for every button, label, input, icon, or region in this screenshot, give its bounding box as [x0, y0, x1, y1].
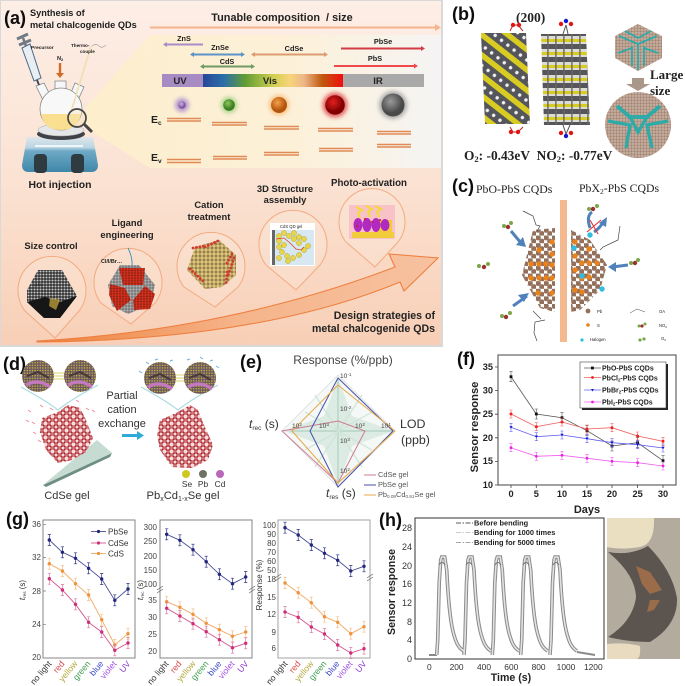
- label: large size: Large: [650, 67, 683, 82]
- legend f: -PbS CQDs: [621, 388, 659, 394]
- label: large size: size: [650, 83, 670, 98]
- chart: t res: 28: [32, 587, 42, 596]
- label PbxCd1-xSe gel: x: [160, 496, 164, 503]
- legend c: S: [597, 323, 600, 328]
- small nanocrystal: [615, 24, 662, 71]
- y tick labels: 12: [402, 598, 412, 608]
- label PbxCd1-xSe gel: Pb: [147, 490, 160, 502]
- legend h: [456, 518, 555, 547]
- tick labels: 10: [355, 423, 362, 430]
- legend c: O: [661, 336, 664, 341]
- legend f: PbO-PbS CQDs: [602, 366, 654, 372]
- series: PbBr2-PbS: [511, 427, 663, 448]
- y tick labels: 10: [483, 480, 493, 490]
- x tick labels: [427, 662, 603, 672]
- illustration: hot injection apparatus: Precursor: [31, 45, 54, 51]
- tick labels: 1: [388, 422, 391, 427]
- text: partial cation exchange: cation: [107, 404, 137, 416]
- axis label: t res: res: [329, 494, 339, 501]
- label CdSe gel: CdSe gel: [44, 490, 90, 502]
- chart: t rec: 250: [144, 537, 158, 546]
- exchanged gel: [139, 357, 219, 468]
- panel (a): synthesis and design strategies: [0, 0, 442, 346]
- large nanocrystal: [605, 92, 671, 158]
- label PbxCd1-xSe gel: 1-x: [178, 496, 188, 503]
- chart: response: red: [287, 659, 303, 675]
- chart: t rec: 100: [144, 580, 158, 589]
- tick labels: 10: [340, 406, 347, 413]
- x tick labels: 1200: [584, 662, 603, 672]
- illustration: hot injection apparatus: N: [57, 56, 61, 62]
- chart: t res: yellow: [57, 658, 80, 684]
- x tick labels: 600: [504, 662, 519, 672]
- adsorption energies: 2: [474, 154, 479, 164]
- slab: O2 adsorption: [481, 23, 530, 134]
- spectrum bar: IR: [373, 76, 383, 87]
- legend e: Se gel: [414, 490, 436, 499]
- big design arrow: [37, 254, 438, 342]
- y tick labels: 15: [483, 456, 493, 466]
- legend d: Se: [182, 479, 192, 489]
- axis label: t res: (s): [338, 486, 356, 500]
- caption: design strategies: metal chalcogenide QDs: [312, 323, 435, 335]
- tick labels: 3: [326, 422, 329, 427]
- blocked cross: [587, 220, 601, 234]
- text: partial cation exchange: exchange: [98, 418, 146, 430]
- axis label: LOD: LOD: [400, 417, 426, 431]
- chart: t rec: t: [136, 597, 145, 600]
- panel label g: (g): [6, 509, 29, 529]
- chart: t res: no light: [28, 658, 54, 686]
- axis label: t res: t: [326, 486, 330, 500]
- heading: PbX2-PbS: -PbS CQDs: [604, 181, 660, 195]
- legend c: 2: [664, 338, 666, 342]
- chart: t rec: blue: [205, 659, 224, 678]
- panel (e): radar chart: [240, 352, 436, 501]
- y tick labels: 20: [483, 433, 493, 443]
- quantum dot spheres: [175, 91, 407, 119]
- material ranges: ZnS: [177, 34, 191, 43]
- panel label e: (e): [240, 352, 262, 372]
- series: PbSe gel: [310, 378, 393, 487]
- slab: NO2 adsorption: [541, 19, 590, 138]
- ligand chains: [523, 211, 620, 341]
- panel label c: (c): [452, 176, 474, 196]
- chart: t rec: (s): [136, 580, 145, 591]
- chart: response: 9: [272, 628, 277, 637]
- label: large size: [650, 67, 683, 98]
- chart: response: Response (%): [255, 559, 264, 610]
- series: Pb0.09Cd0.91Se gel: [292, 385, 395, 483]
- panel (b): facets and adsorption: [452, 4, 683, 164]
- spectrum bar: UV: [173, 76, 187, 87]
- series: CdSe gel: [282, 421, 365, 483]
- legend c: 2: [665, 325, 667, 329]
- chart: t res: 36: [32, 520, 42, 529]
- chart: t res: t: [18, 597, 27, 600]
- y tick labels: 16: [402, 579, 412, 589]
- chart: response: 90: [267, 530, 277, 539]
- illustration: hot injection apparatus: couple: [80, 49, 95, 54]
- chart: response: [255, 520, 373, 686]
- energy labels: E: [151, 114, 158, 126]
- legend f: 2: [619, 390, 622, 394]
- chart: t res: violet: [98, 658, 119, 681]
- chart: t res: 20: [32, 653, 42, 662]
- heading: response: Response (%/ppb): [293, 353, 393, 367]
- axis label: LOD: [400, 417, 430, 447]
- legend f: -PbS CQDs: [615, 400, 653, 406]
- panel label a: (a): [4, 8, 26, 28]
- series: PbO-PbS: [511, 377, 663, 461]
- chart: t rec: green: [189, 659, 211, 682]
- x tick labels: 20: [607, 489, 617, 499]
- x tick labels: [508, 489, 668, 499]
- tick labels: 2: [362, 422, 365, 427]
- x tick labels: 1000: [557, 662, 576, 672]
- x axis title: Days: [574, 504, 600, 516]
- legend f: PbI: [602, 400, 613, 406]
- heading: synthesis: [30, 8, 137, 30]
- legend h: Bending for 1000 times: [474, 528, 555, 537]
- CdSe gel on substrate: [21, 360, 112, 487]
- tick labels: 10: [292, 423, 299, 430]
- legend e: 0.09: [387, 494, 396, 499]
- tick labels: 10: [340, 373, 347, 380]
- right quantum dot: [571, 230, 607, 312]
- y tick labels: 24: [402, 542, 412, 552]
- material ranges: CdS: [220, 57, 234, 66]
- tick labels: -2: [347, 405, 352, 410]
- series: PbCl2-PbS: [511, 414, 663, 441]
- chart: t rec: 200: [144, 552, 158, 561]
- chart: response: 12: [267, 610, 277, 619]
- legend c: Halogen: [590, 337, 606, 342]
- heading: synthesis: metal chalcogenide QDs: [30, 20, 137, 30]
- chart: t rec: 20: [148, 647, 158, 656]
- chart: t res: UV: [117, 659, 133, 674]
- y tick labels: [402, 523, 412, 664]
- chart: t rec: 35: [148, 596, 158, 605]
- chart: response: yellow: [293, 658, 316, 684]
- legend f: PbCl: [602, 376, 618, 382]
- x tick labels: 800: [532, 662, 546, 672]
- panel label f: (f): [457, 349, 475, 369]
- energy levels: [167, 118, 411, 162]
- chart: t res: 32: [32, 553, 42, 562]
- chart: response: 80: [267, 539, 277, 548]
- chart: t res: 24: [32, 620, 42, 629]
- y tick labels: 30: [483, 386, 493, 396]
- spectrum bar: [162, 74, 424, 87]
- panel (c): CQD gas adsorption: [452, 176, 667, 342]
- y tick labels: 8: [407, 617, 412, 627]
- material ranges: CdSe: [285, 44, 303, 53]
- arrow: exchange: [122, 431, 144, 440]
- axis label: LOD: (ppb): [401, 433, 430, 447]
- chart: response: violet: [334, 658, 355, 681]
- gas molecules: [477, 204, 640, 319]
- adsorption energies: : -0.43eV NO: [479, 148, 557, 163]
- legend d: Cd: [215, 479, 226, 489]
- legend e: Pb: [378, 490, 387, 499]
- x axis title: Time (s): [491, 672, 531, 684]
- pin: size control: Size control: [24, 240, 78, 251]
- tick labels: 10: [319, 423, 326, 430]
- chart: t rec: 30: [148, 613, 158, 622]
- x tick labels: 15: [582, 489, 592, 499]
- pin: cation treatment: [177, 199, 245, 307]
- pin: photo-activation: Photo-activation: [331, 178, 407, 189]
- x tick labels: 30: [658, 489, 668, 499]
- heading: PbX2-PbS: 2: [600, 187, 604, 196]
- pin: ligand engineering: Cl/I/Br…: [101, 259, 122, 265]
- panel (f): stability line chart: [457, 349, 676, 516]
- chart: response: 50: [267, 566, 277, 575]
- x tick labels: 0: [508, 489, 514, 499]
- label: hot injection: Hot injection: [29, 180, 91, 191]
- legend f: 2: [618, 378, 621, 382]
- x tick labels: 25: [632, 489, 643, 499]
- panel (g): light-activated performance charts: [6, 509, 373, 686]
- y tick labels: 0: [407, 654, 412, 664]
- x tick labels: 10: [557, 489, 567, 499]
- chart: t rec: yellow: [175, 658, 198, 684]
- y axis title: Sensor response: [469, 382, 481, 472]
- legend e: Cd: [396, 490, 405, 499]
- panel label h: (h): [379, 510, 402, 530]
- legend g: PbSe: [108, 528, 128, 536]
- adsorption energies: : -0.77eV: [561, 148, 613, 163]
- response curves: [429, 557, 595, 655]
- legend e: 0.91: [405, 494, 415, 499]
- chart: response: 60: [267, 557, 277, 566]
- legend d: [182, 470, 226, 489]
- pin: cation treatment: treatment: [188, 211, 230, 222]
- arrow: tunable composition: [150, 24, 441, 31]
- arrowheads: [516, 217, 616, 302]
- spectrum bar: Vis: [263, 76, 277, 87]
- adsorption energies: O: [464, 148, 474, 163]
- material ranges: [163, 34, 425, 69]
- left quantum dot: [522, 228, 555, 312]
- chart: response: green: [307, 659, 329, 682]
- legend e: PbSe gel: [378, 480, 408, 489]
- y tick labels: 4: [407, 635, 412, 645]
- series: PbI2-PbS: [511, 448, 663, 466]
- legend d: Pb: [198, 479, 208, 489]
- illustration: hot injection apparatus: Thermo-: [71, 43, 90, 48]
- chart: t res: [18, 520, 135, 686]
- chart: response: 18: [267, 575, 277, 584]
- chart: t res: (s): [18, 580, 27, 591]
- chart: t rec: rec: [140, 591, 145, 598]
- panel label b: (b): [452, 4, 475, 24]
- energy labels: [151, 114, 162, 165]
- legend c: OA: [659, 309, 665, 314]
- axis label: t rec: t: [249, 417, 253, 431]
- x tick labels: 400: [477, 662, 491, 672]
- legend f: PbBr: [602, 388, 619, 394]
- chart: t rec: violet: [216, 658, 237, 681]
- chart: t rec: UV: [235, 659, 251, 674]
- heading: tunable composition: Tunable composition / size: [211, 12, 353, 24]
- chart: response: 70: [267, 548, 277, 557]
- axes frame: [498, 355, 676, 485]
- radar grid: [282, 375, 395, 487]
- facet label: (200): [516, 10, 545, 25]
- label PbxCd1-xSe gel: Se gel: [188, 490, 219, 502]
- photo: bent device: [607, 518, 680, 659]
- legend c: Pb: [597, 309, 603, 314]
- panel (h): bending response: [379, 510, 680, 684]
- pin: 3D structure assembly: [257, 183, 327, 290]
- x tick labels: 0: [427, 662, 432, 672]
- energy labels: c: [158, 120, 162, 127]
- heading: synthesis: Synthesis of: [30, 8, 86, 18]
- divider bar: [560, 200, 567, 342]
- chart: t rec: [136, 520, 255, 686]
- panel (d): partial cation exchange: [3, 354, 226, 503]
- x tick labels: 5: [534, 489, 539, 499]
- energy labels: E: [151, 152, 158, 164]
- tick labels: 10: [340, 438, 347, 445]
- chart: t rec: 25: [148, 630, 158, 639]
- tick labels: [292, 372, 391, 475]
- tick labels: -1: [347, 372, 352, 377]
- pin: ligand engineering: [94, 217, 162, 324]
- y tick labels: 28: [402, 523, 412, 533]
- legend f: 2: [613, 402, 616, 406]
- pin: 3D structure assembly: assembly: [264, 194, 307, 205]
- y tick labels: 20: [402, 561, 412, 571]
- pin: size control: [18, 240, 86, 338]
- caption: design strategies: [312, 310, 435, 335]
- pin: ligand engineering: Ligand: [112, 217, 143, 228]
- chart: response: UV: [353, 659, 369, 674]
- material ranges: PbSe: [374, 37, 392, 46]
- illustration: hot injection apparatus: [17, 34, 106, 173]
- text: partial cation exchange: Partial: [106, 390, 138, 402]
- axis label: t rec: rec: [252, 425, 262, 432]
- axis ticks: [495, 367, 663, 488]
- pin: cation treatment: Cation: [194, 199, 224, 210]
- y tick labels: 25: [483, 409, 493, 419]
- axis label: t rec: (s): [261, 417, 279, 431]
- adsorption energies: 2: [557, 154, 561, 164]
- pin: size control: (111): [34, 282, 43, 287]
- label PbxCd1-xSe gel: Cd: [164, 490, 178, 502]
- legend e: CdSe gel: [378, 470, 409, 479]
- tick labels: 10: [381, 423, 388, 430]
- legend f: -PbS CQDs: [620, 376, 658, 382]
- y tick labels: [483, 362, 493, 490]
- chart: t res: blue: [87, 659, 106, 678]
- heading: PbX2-PbS: PbX: [579, 181, 600, 195]
- legend g: CdSe: [108, 539, 129, 548]
- chart: response: 15: [267, 593, 277, 602]
- chart: response: 100: [263, 521, 277, 530]
- material ranges: ZnSe: [211, 43, 229, 52]
- illustration: hot injection apparatus: 2: [61, 57, 64, 62]
- axes frame: [415, 518, 604, 659]
- tick labels: 2: [347, 467, 350, 472]
- y axis title: Sensor response: [386, 549, 398, 635]
- heading: PbO-PbS: PbO-PbS CQDs: [476, 182, 553, 196]
- chart: t rec: 300: [144, 523, 158, 532]
- pin: 3D structure assembly: 3D Structure: [257, 183, 313, 194]
- chart: t rec: 150: [144, 566, 158, 575]
- zoom wedge and tunable composition background: [85, 35, 441, 168]
- panel label d: (d): [3, 354, 26, 374]
- chart: response: no light: [264, 658, 290, 686]
- tick labels: 3: [347, 437, 350, 442]
- caption: design strategies: Design strategies of: [334, 310, 435, 322]
- material ranges: PbS: [368, 54, 382, 63]
- energy labels: v: [158, 158, 162, 165]
- legend c: NO: [659, 323, 665, 328]
- chart: t res: res: [22, 591, 27, 598]
- arrows: gas approach: [511, 212, 628, 306]
- legend e: [364, 470, 436, 499]
- pin: 3D structure assembly: CdS QD gel: [280, 224, 302, 229]
- chart: t res: red: [51, 659, 67, 675]
- chart: t res: green: [71, 659, 93, 682]
- legend g: CdS: [108, 550, 124, 558]
- legend h: Before bending: [474, 518, 529, 528]
- chart: t rec: no light: [145, 658, 171, 686]
- legend c: [580, 309, 667, 342]
- chart: response: 6: [272, 644, 277, 653]
- legend h: Bending for 5000 times: [474, 538, 555, 547]
- chart: response: blue: [323, 659, 342, 678]
- pin: ligand engineering: engineering: [100, 229, 154, 240]
- arrow: large size: [626, 78, 650, 91]
- legend f: [580, 362, 668, 410]
- text: partial cation exchange: [98, 390, 146, 430]
- chart: t rec: red: [168, 659, 184, 675]
- legend g: [91, 528, 129, 558]
- pin: photo-activation: [331, 178, 407, 267]
- y tick labels: 35: [483, 362, 493, 372]
- tick labels: 2: [299, 422, 302, 427]
- x tick labels: 200: [450, 662, 464, 672]
- tick labels: 10: [340, 468, 347, 475]
